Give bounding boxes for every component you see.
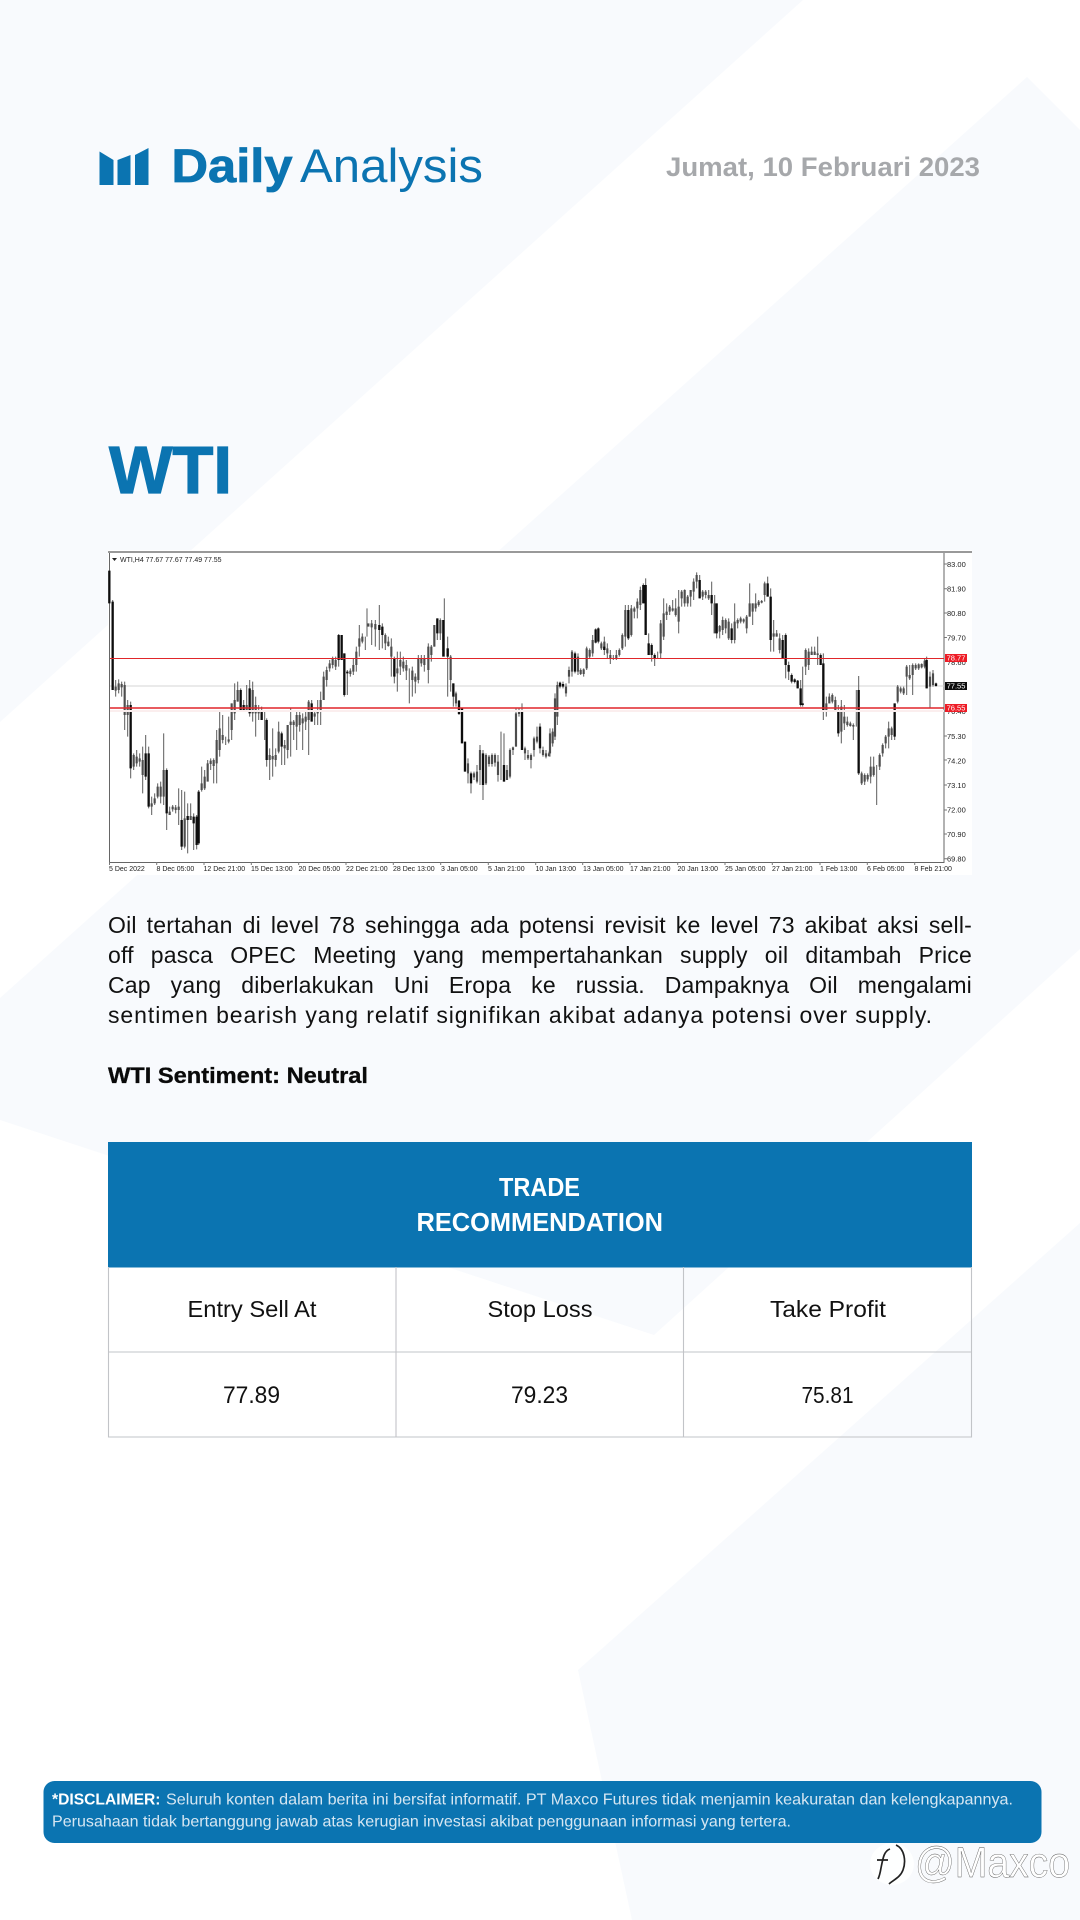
- column labels: Stop Loss: [488, 1296, 592, 1322]
- trade values: [223, 1382, 854, 1409]
- disclaimer bar: Perusahaan tidak bertanggung jawab atas kerugian investasi akibat penggunaan informasi yang tertera.: [52, 1814, 791, 1830]
- time axis labels: 28 Dec 13:00: [393, 866, 435, 873]
- candles: January to February: [550, 572, 936, 805]
- price axis labels: 76.40: [947, 707, 966, 716]
- time axis labels: [109, 866, 952, 873]
- time axis labels: 1 Feb 13:00: [820, 866, 857, 873]
- trade values: 79.23: [511, 1382, 568, 1409]
- price axis labels: 78.60: [947, 658, 966, 667]
- price axis labels: 75.30: [947, 732, 966, 741]
- price axis labels: 69.80: [947, 854, 966, 864]
- analysis paragraph: off pasca OPEC Meeting yang mempertahankan supply oil ditambah Price: [108, 942, 972, 968]
- support resistance lines: [110, 658, 944, 660]
- time axis labels: 22 Dec 21:00: [346, 866, 388, 873]
- time axis labels: 25 Jan 05:00: [725, 866, 766, 873]
- disclaimer bar: *DISCLAIMER:: [52, 1792, 160, 1808]
- price axis labels: 74.20: [947, 756, 966, 766]
- panel: trade recommendation table: [108, 1142, 972, 1437]
- price axis labels: 79.70: [947, 634, 966, 642]
- candles: December to January: [109, 571, 549, 853]
- table grid: [108, 1267, 972, 1437]
- chart symbol label: WTI,H4 77.67 77.67 77.49 77.55: [120, 557, 222, 564]
- table header: RECOMMENDATION: [416, 1209, 663, 1237]
- trade values: 75.81: [802, 1382, 854, 1408]
- time axis labels: 20 Jan 13:00: [678, 866, 718, 873]
- analysis paragraph: sentimen bearish yang relatif signifikan akibat adanya potensi over supply.: [108, 1002, 933, 1028]
- price axis labels: 73.10: [947, 781, 966, 790]
- price axis labels: 81.90: [947, 584, 966, 594]
- time axis labels: 8 Feb 21:00: [914, 866, 952, 873]
- table header: [108, 1142, 972, 1268]
- price axis labels: 80.80: [947, 609, 966, 618]
- date: Jumat, 10 Februari 2023: [666, 152, 980, 182]
- analysis paragraph: Oil tertahan di level 78 sehingga ada potensi revisit ke level 73 akibat aksi sell-: [108, 912, 972, 938]
- time axis labels: 13 Jan 05:00: [583, 866, 624, 873]
- price tags: 78.77: [947, 654, 965, 663]
- table header: TRADE: [499, 1174, 580, 1202]
- watermark icon: [870, 1843, 914, 1885]
- price axis labels: [947, 560, 966, 864]
- time axis labels: 5 Jan 21:00: [488, 866, 525, 873]
- logo word: Daily: Daily: [172, 139, 292, 192]
- time axis labels: 27 Jan 21:00: [772, 866, 813, 873]
- time axis labels: 15 Dec 13:00: [251, 866, 293, 873]
- time axis labels: 20 Dec 05:00: [298, 866, 340, 873]
- time axis labels: 6 Feb 05:00: [867, 866, 904, 873]
- time axis labels: 12 Dec 21:00: [204, 866, 245, 873]
- time axis labels: 5 Dec 2022: [109, 866, 145, 873]
- icon: bars logo: [100, 148, 148, 185]
- time axis labels: 8 Dec 05:00: [156, 866, 194, 873]
- price axis labels: 70.90: [947, 830, 966, 839]
- time axis labels: 3 Jan 05:00: [441, 866, 478, 873]
- candlestick chart WTI H4: [108, 550, 972, 875]
- watermark @Maxco: [870, 1839, 1070, 1887]
- column labels: Take Profit: [770, 1296, 886, 1322]
- price tags: 76.55: [947, 704, 965, 713]
- logo: Daily Analysis: [100, 139, 483, 192]
- trade values: 77.89: [223, 1382, 280, 1409]
- analysis paragraph: [108, 912, 972, 1028]
- analysis paragraph: Cap yang diberlakukan Uni Eropa ke russia. Dampaknya Oil mengalami: [108, 972, 972, 998]
- price axis labels: 72.00: [947, 806, 966, 814]
- price axis labels: 83.00: [947, 560, 966, 569]
- price tags: 77.55: [947, 682, 965, 691]
- disclaimer bar: [44, 1781, 1042, 1843]
- time axis labels: 17 Jan 21:00: [630, 866, 671, 873]
- column labels: Entry Sell At: [188, 1296, 317, 1322]
- sentiment line: WTI Sentiment: Neutral: [108, 1063, 368, 1088]
- title: WTI: WTI: [109, 433, 232, 508]
- time axis labels: 10 Jan 13:00: [536, 866, 576, 873]
- price tags: [945, 654, 967, 713]
- column labels: [188, 1296, 886, 1322]
- disclaimer bar: Seluruh konten dalam berita ini bersifat informatif. PT Maxco Futures tidak menjamin keakuratan dan kelengkapannya.: [166, 1792, 1013, 1808]
- logo word: Analysis: Analysis: [300, 139, 483, 192]
